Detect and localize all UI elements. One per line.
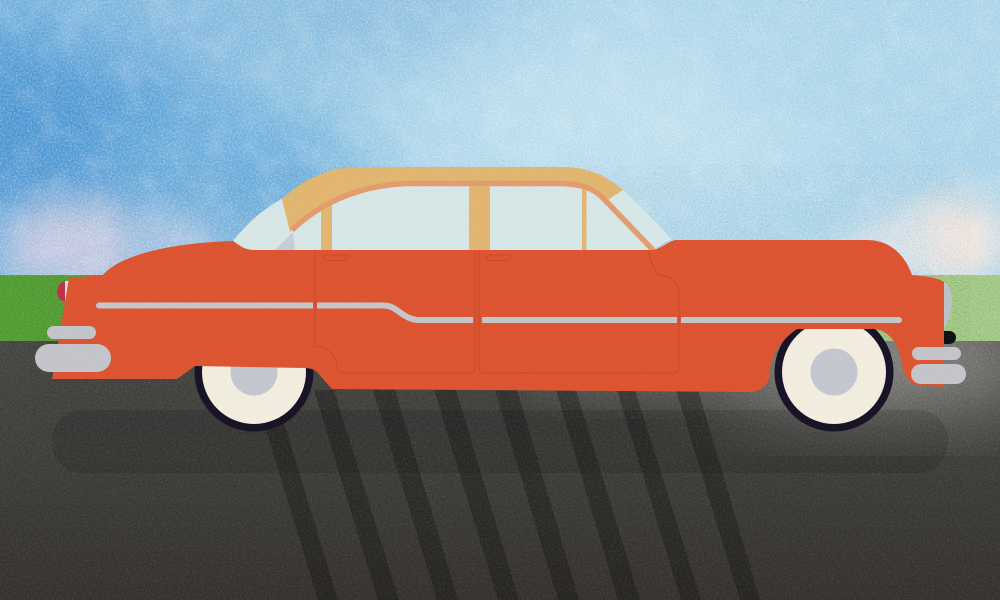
window glass xyxy=(233,168,672,250)
front pillar xyxy=(582,186,586,251)
car body xyxy=(52,240,944,392)
door handles xyxy=(324,255,510,260)
rear pillar xyxy=(321,204,332,251)
headlight chrome xyxy=(943,281,952,331)
ground shadow xyxy=(52,410,948,473)
grass band xyxy=(0,275,1000,342)
front bumper xyxy=(911,347,966,384)
rear quarter window shade xyxy=(275,232,295,250)
front wheel xyxy=(774,312,894,432)
roof xyxy=(282,167,623,232)
tyre tracks xyxy=(254,390,760,600)
road xyxy=(0,341,1000,600)
car xyxy=(35,167,966,432)
window trim xyxy=(292,184,653,250)
rear wheel xyxy=(194,312,314,432)
tail light xyxy=(57,281,70,302)
chrome side trim xyxy=(96,302,902,323)
car surface grain xyxy=(30,165,970,435)
front bumper nub xyxy=(936,331,956,344)
centre pillar xyxy=(469,183,490,251)
rear bumper xyxy=(35,326,111,372)
door outlines xyxy=(315,250,679,373)
sky background xyxy=(0,0,1000,291)
